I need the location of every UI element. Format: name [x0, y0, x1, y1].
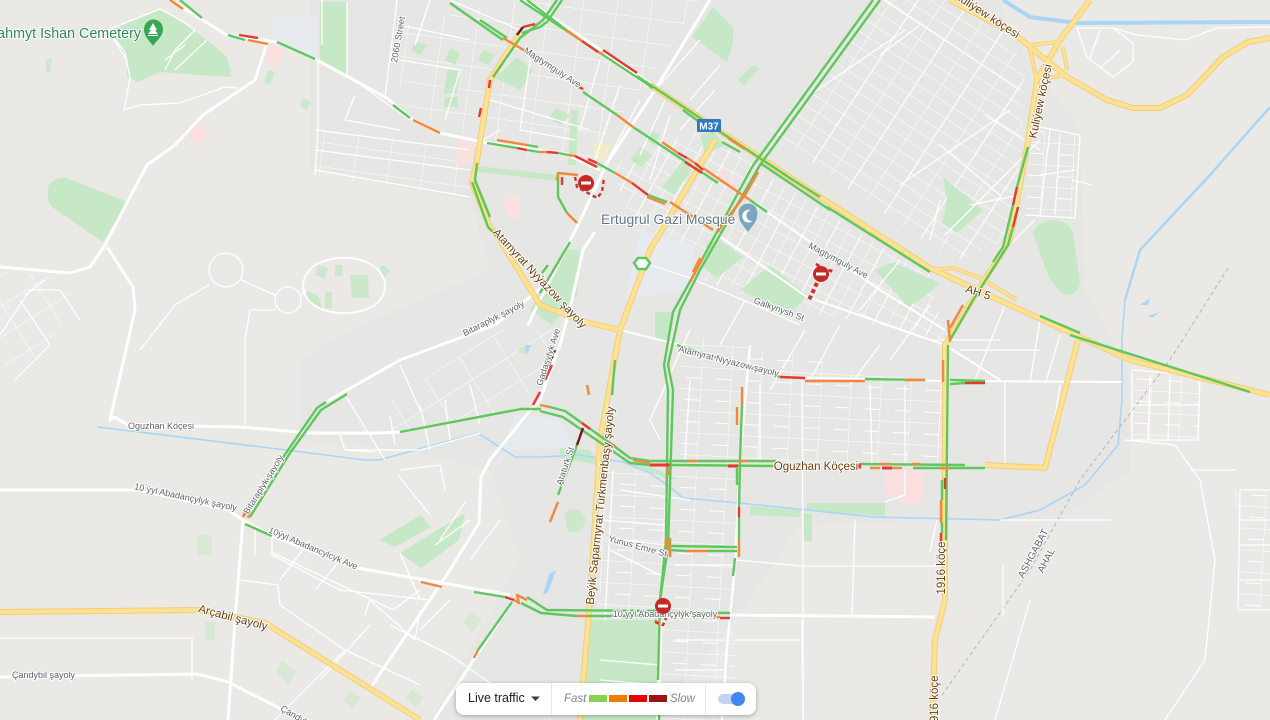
dropdown caret — [531, 696, 540, 701]
west campus — [0, 253, 306, 425]
road labels minor: AHAL — [1036, 546, 1058, 575]
swatch: fast — [589, 695, 607, 702]
legend dividers — [552, 683, 706, 715]
road: Ataturk — [371, 232, 595, 687]
park: AH 5 — [875, 262, 940, 307]
shield: M37: M37 — [699, 122, 719, 132]
traffic: closure dashes — [575, 177, 835, 625]
road: west diagonal — [0, 43, 267, 273]
swatch: very slow — [649, 695, 667, 702]
park: north rectangle — [320, 2, 347, 75]
road labels minor: 10ýyl Abadancylcyk Ave — [267, 525, 359, 572]
icon: cemetery pin — [144, 19, 163, 46]
road: vertical south — [658, 620, 661, 720]
grid: south-west of centre — [330, 330, 570, 440]
park: stadium patches — [306, 265, 390, 308]
special areas — [188, 15, 923, 502]
road labels minor: Galkynysh St — [752, 295, 806, 323]
grid: centre east — [680, 335, 945, 465]
road: Magtymguly east — [718, 235, 1000, 380]
grid: south-east edge — [1132, 370, 1200, 440]
swatch: slow — [629, 695, 647, 702]
canal upper — [1125, 107, 1270, 300]
icon: road closure south — [655, 598, 671, 614]
grid: central north — [400, 0, 700, 165]
lakes — [525, 298, 1160, 595]
north-east estate — [1077, 27, 1270, 77]
park: east one — [942, 177, 983, 233]
road: vertical 740 — [722, 345, 750, 720]
road: 10 yyl east — [730, 615, 935, 617]
park: Galkynysh — [740, 265, 807, 315]
grid: east block — [1025, 130, 1080, 218]
area: hospital south — [885, 470, 923, 502]
park: strip vertical — [568, 110, 578, 165]
road: south diagonal — [434, 602, 512, 720]
icon: mosque pin — [738, 203, 758, 232]
grid: south centre — [600, 470, 735, 610]
park: mosque south — [703, 240, 743, 278]
west of Oguzhan — [340, 365, 480, 460]
east block — [1025, 125, 1092, 218]
grid: west housing — [0, 272, 75, 382]
urban area — [300, 0, 1130, 720]
icon: road closure west — [578, 175, 594, 191]
cemetery paths — [108, 9, 238, 110]
road labels minor: Bitaraplyk şayoly — [461, 298, 526, 338]
park: bottom large — [580, 620, 658, 720]
road labels minor: 10 ýyl Abadançylyk şayoly — [133, 481, 238, 513]
legend: fast: Fast — [564, 693, 587, 705]
park: south west lots — [198, 535, 482, 710]
water — [98, 0, 1270, 595]
stadium ring — [303, 258, 385, 313]
area: education — [593, 143, 612, 162]
road labels major: Oguzhan Köçesi — [774, 461, 858, 473]
road labels major: AH 5 — [964, 283, 992, 303]
centre verticals — [685, 380, 1060, 720]
park: small north east — [738, 65, 760, 85]
park: canal strips — [560, 448, 885, 541]
grid: far south-east — [1235, 490, 1270, 610]
south-west — [0, 465, 500, 720]
road labels minor: Atamyrat Nyýazow şayoly — [678, 344, 780, 379]
park: central diagonal — [530, 250, 580, 325]
park: small scattered — [46, 58, 585, 532]
north-west — [315, 0, 520, 197]
park: cemetery — [108, 9, 232, 82]
grid: centre — [610, 130, 945, 340]
road labels minor: Çandybil şayoly — [12, 670, 76, 680]
traffic: slow red — [239, 24, 1018, 618]
traffic: very slow dark red — [517, 27, 583, 445]
road labels minor: ASHGABAT — [1016, 528, 1051, 580]
north-east — [810, 0, 1045, 255]
park: Oguzhan south — [655, 312, 672, 340]
canal — [98, 300, 1125, 520]
road: Candybil — [0, 674, 303, 720]
legend: slow: Slow — [670, 693, 696, 705]
park: central north — [495, 57, 533, 90]
live traffic dropdown: Live traffic — [468, 691, 525, 705]
road: Galkynysh upper — [767, 212, 945, 330]
park: oval west — [48, 178, 127, 242]
road labels minor: 2060 Street — [389, 15, 407, 63]
road: vertical west — [228, 520, 243, 720]
swatch: moderate — [609, 695, 627, 702]
road labels minor: Yunus Emre St — [607, 534, 669, 559]
road labels minor: Magtymguly Ave — [522, 45, 583, 90]
road labels major: Beýik Saparmyrat Türkmenbaşy şayoly — [585, 406, 617, 605]
park: south west pair — [379, 513, 465, 568]
road: Atamyrat east — [620, 330, 1122, 382]
road labels minor: Gadasylyk Ave — [534, 327, 562, 387]
grid: north-east district — [770, 0, 1025, 260]
road labels major — [197, 0, 1055, 720]
shield: M37 — [697, 119, 721, 132]
park: strip horizontal — [478, 166, 558, 181]
park: blocks north — [412, 42, 570, 125]
south-east — [995, 370, 1270, 720]
road: north-west artery — [170, 0, 600, 170]
road labels minor: 10 ýyl Abadançylyk şayoly — [613, 609, 718, 619]
park: racecourse — [1033, 220, 1080, 295]
road: main north — [524, 0, 650, 85]
railway — [940, 268, 1228, 698]
Galkynysh and centre — [650, 260, 1060, 440]
road: west branch — [107, 247, 400, 433]
road: M37 north — [528, 0, 710, 325]
area: hospital pink north — [188, 43, 742, 220]
road labels minor: Oguzhan Köçesi — [128, 421, 194, 431]
road labels minor: Magtymguly Ave — [807, 240, 870, 280]
road labels major: Arçabil şayoly — [197, 603, 269, 633]
icon: highway marker — [634, 258, 650, 269]
road labels major: Kuliýew köçesi — [1027, 63, 1055, 140]
legend panel — [456, 683, 756, 715]
grid: south of 10 yyl — [620, 620, 735, 720]
road labels minor: Ataturk St — [554, 445, 576, 486]
icon: road closure east — [813, 266, 829, 282]
park: north east — [692, 7, 733, 62]
traffic: moderate orange — [170, 0, 963, 658]
park: block near mosque — [630, 130, 725, 195]
south centre — [600, 470, 1003, 720]
road: Bitaraplyk east — [326, 285, 545, 402]
road labels minor: Bitaraplyk şayoly — [241, 453, 286, 516]
road: 10 yyl west — [0, 490, 510, 595]
toggle — [718, 692, 745, 706]
label: Ertugrul Gazi Mosque: Ertugrul Gazi Mosque — [601, 211, 736, 227]
road labels major: Atamyrat Nyýazow şayoly — [490, 227, 589, 331]
central north — [475, 40, 720, 180]
river north — [1003, 0, 1270, 23]
area: blue-grey block — [272, 15, 695, 470]
grid: west industrial — [315, 130, 470, 197]
road labels major: 1916 köçe — [936, 541, 948, 595]
